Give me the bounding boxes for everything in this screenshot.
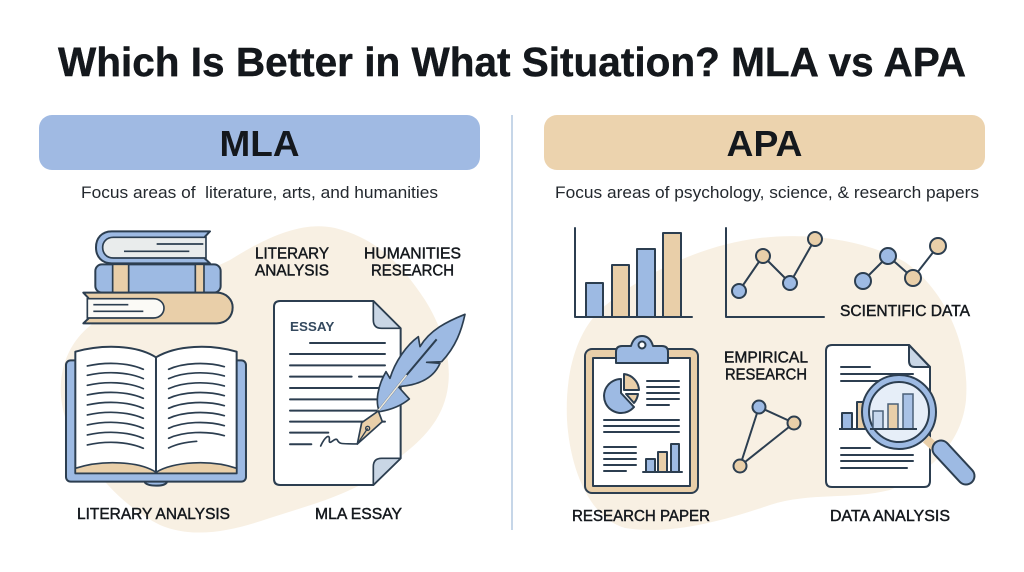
label: humanities research: RESEARCH: [371, 262, 454, 280]
MLA subtitle: Focus areas of literature, arts, and humanities: [81, 183, 438, 202]
label: empirical research: [724, 350, 808, 384]
label: MLA essay: MLA ESSAY: [315, 506, 402, 523]
label: empirical research: EMPIRICAL: [724, 350, 808, 366]
MLA header bar: MLA: [220, 123, 300, 164]
icon: open book: [66, 347, 246, 486]
icon: scientific data nodes: [855, 238, 946, 289]
label: scientific data: SCIENTIFIC DATA: [840, 303, 970, 320]
line chart: [726, 228, 824, 317]
MLA header bar: [39, 115, 480, 170]
APA header bar: [544, 115, 985, 170]
label: research paper: RESEARCH PAPER: [572, 508, 710, 525]
label: literary analysis top: ANALYSIS: [255, 262, 329, 280]
icon: essay with quill: [274, 301, 465, 485]
icon: essay with quill: ESSAY: [290, 320, 335, 334]
background blob: MLA: [61, 226, 449, 533]
bar chart: [575, 228, 692, 317]
label: humanities research: [364, 246, 461, 280]
panel: APA: [544, 115, 985, 530]
label: data analysis: DATA ANALYSIS: [830, 508, 950, 525]
label: literary analysis bottom: LITERARY ANALYSIS: [77, 506, 230, 523]
icon: research paper clipboard: [585, 336, 698, 493]
icon: stack of books: [83, 231, 233, 323]
label: literary analysis top: [255, 246, 329, 280]
label: empirical research: RESEARCH: [725, 366, 807, 384]
label: literary analysis top: LITERARY: [255, 246, 329, 262]
panel: MLA: [39, 115, 480, 533]
APA header bar: APA: [726, 123, 802, 164]
background blob: APA: [567, 236, 966, 530]
icon: network triangle: [734, 400, 800, 472]
APA subtitle: Focus areas of psychology, science, & research papers: [555, 183, 979, 202]
title: Which Is Better in What Situation? MLA vs APA: [58, 39, 966, 85]
label: humanities research: HUMANITIES: [364, 246, 461, 262]
icon: data analysis document with magnifier: [826, 345, 966, 487]
